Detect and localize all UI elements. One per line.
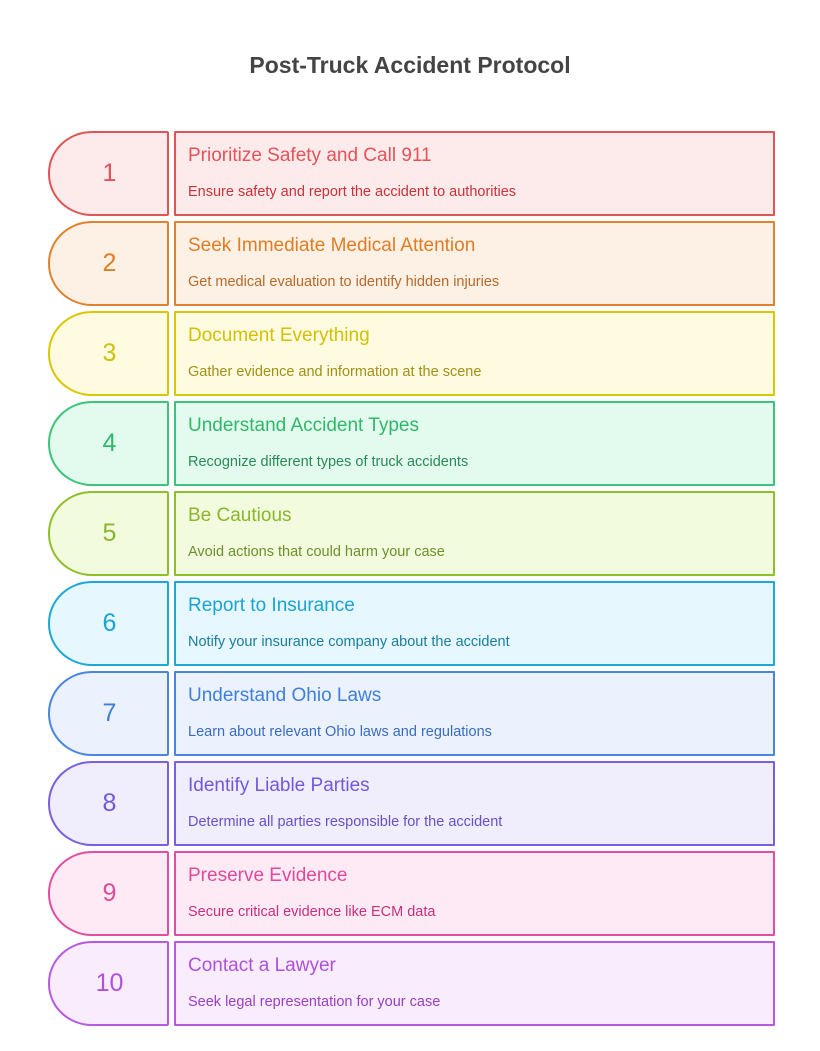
step 1: Ensure safety and report the accident to authorities [188, 184, 516, 200]
step 5: Avoid actions that could harm your case [188, 544, 445, 560]
step 1: 1 [103, 159, 116, 187]
step 1: Prioritize Safety and Call 911 [188, 145, 432, 166]
step 2: Get medical evaluation to identify hidden injuries [188, 274, 499, 290]
step 10: Seek legal representation for your case [188, 994, 440, 1010]
step 8: Determine all parties responsible for the accident [188, 814, 502, 830]
step 9: Preserve Evidence [188, 865, 347, 886]
step 4: Understand Accident Types [188, 415, 419, 436]
step 4 [48, 401, 775, 486]
step 6: Report to Insurance [188, 595, 355, 616]
step 2: 2 [103, 249, 116, 277]
step 6 [48, 581, 775, 666]
step 8 [48, 761, 775, 846]
step 9: 9 [103, 879, 116, 907]
step 10: Contact a Lawyer [188, 955, 336, 976]
step 1 [48, 131, 775, 216]
step 3: 3 [103, 339, 116, 367]
step 3 [48, 311, 775, 396]
step 8: Identify Liable Parties [188, 775, 370, 796]
step 10 [48, 941, 775, 1026]
step 5: 5 [103, 519, 116, 547]
step 2: Seek Immediate Medical Attention [188, 235, 475, 256]
step 7: Understand Ohio Laws [188, 685, 381, 706]
step 5: Be Cautious [188, 505, 292, 526]
step 9: Secure critical evidence like ECM data [188, 904, 435, 920]
step 4: 4 [103, 429, 116, 457]
step 6: 6 [103, 609, 116, 637]
title: Post-Truck Accident Protocol [249, 52, 571, 78]
step 9 [48, 851, 775, 936]
step 8: 8 [103, 789, 116, 817]
step 5 [48, 491, 775, 576]
step 10: 10 [96, 969, 123, 997]
step 6: Notify your insurance company about the accident [188, 634, 510, 650]
step 3: Document Everything [188, 325, 370, 346]
step 4: Recognize different types of truck accidents [188, 454, 468, 470]
step 7 [48, 671, 775, 756]
step 7: 7 [103, 699, 116, 727]
step 7: Learn about relevant Ohio laws and regulations [188, 724, 492, 740]
step 3: Gather evidence and information at the scene [188, 364, 481, 380]
step 2 [48, 221, 775, 306]
